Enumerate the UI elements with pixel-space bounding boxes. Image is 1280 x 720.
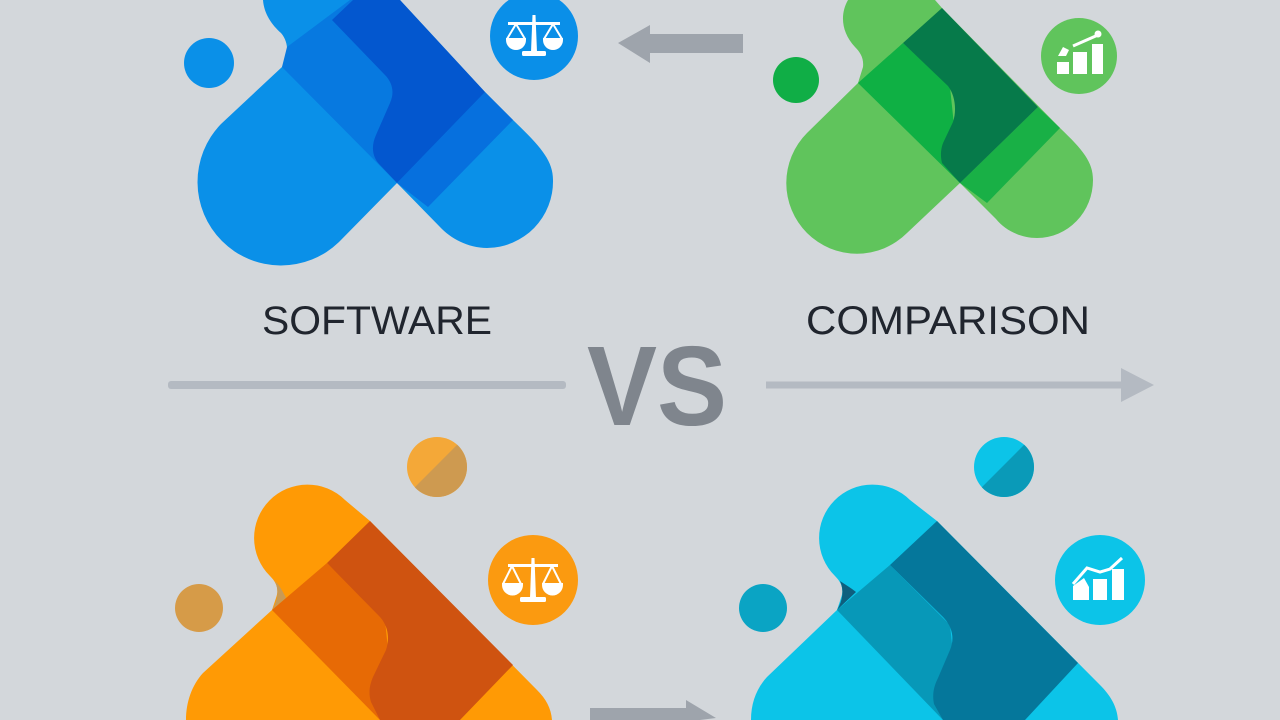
cyan dot (739, 584, 787, 632)
green logo shape (786, 0, 1093, 254)
icon: chart in cyan circle (1055, 535, 1145, 625)
heading: VS: VS (587, 323, 727, 449)
icon: chart in green circle (1041, 18, 1117, 94)
cyan circle: two-tone (974, 437, 1034, 497)
panel: orange logo (175, 437, 578, 720)
label: software: SOFTWARE (262, 299, 492, 343)
orange dot (175, 584, 223, 632)
divider line: left (168, 381, 566, 389)
orange circle: two-tone (407, 437, 467, 497)
panel: green logo (773, 0, 1117, 254)
icon: scales in orange circle (488, 535, 578, 625)
panel: blue logo (184, 0, 578, 265)
panel: cyan logo (739, 437, 1145, 720)
blue dot (184, 38, 234, 88)
green dot (773, 57, 819, 103)
label: comparison: COMPARISON (806, 299, 1090, 343)
blue logo shape (198, 0, 553, 265)
orange logo shape (186, 485, 552, 720)
arrow: bottom pointing right (590, 700, 716, 720)
arrow: divider pointing right (766, 368, 1154, 402)
arrow: top pointing left (618, 25, 743, 63)
icon: scales in blue circle (490, 0, 578, 80)
cyan logo shape (751, 485, 1118, 720)
